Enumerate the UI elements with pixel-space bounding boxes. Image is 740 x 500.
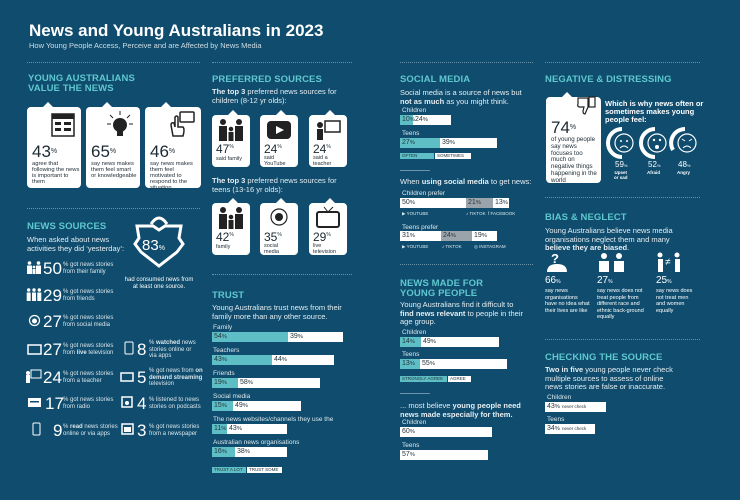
item 8 watched: 8	[137, 340, 146, 359]
card tv 29: live	[313, 243, 321, 249]
chart: trust bars: 39%	[290, 333, 303, 340]
chart: social media often/sometimes: 24%	[415, 116, 428, 123]
face upset 59: 59%	[615, 160, 627, 169]
card 43%	[27, 107, 81, 188]
item 27 tv: from live television	[63, 350, 113, 356]
card 46%: say news makes them feel motivated to respond to the situation	[150, 161, 193, 191]
item 50 family: 50	[43, 259, 62, 278]
chart: trust bars: 15%	[214, 402, 227, 409]
stat 66: say news organisations have no idea what their lives are like	[545, 288, 590, 314]
heading: news sources: NEWS SOURCES	[27, 221, 106, 232]
chart: platform preference: Teens prefer	[402, 224, 438, 231]
chart: platform preference: 13%	[495, 199, 508, 206]
chart: news made for them: Teens	[402, 442, 419, 449]
item 17 radio: from radio	[63, 404, 90, 410]
item 8 watched: % watched news	[149, 340, 196, 346]
card youtube 24: said	[264, 155, 274, 161]
item 50 family: % got news stories	[63, 262, 113, 268]
item 9 read online: 9	[53, 421, 62, 440]
item 50 family: from their family	[63, 268, 106, 274]
card teacher 24: 24%	[313, 142, 331, 156]
text: which is why: Which is why news often or sometimes makes young people feel:	[605, 99, 703, 124]
stat 25	[656, 252, 692, 314]
chart: social media often/sometimes: 39%	[442, 139, 455, 146]
item 27 social	[28, 312, 114, 331]
chart: platform preference: 31%	[402, 232, 415, 239]
card 43%: 43%	[32, 142, 57, 161]
item 3 newspaper	[121, 421, 200, 440]
chart: trust bars: Teachers	[213, 347, 239, 354]
icon: shield 83%: had consumed news from at least one source.	[125, 277, 193, 290]
card tv 29: television	[313, 249, 336, 255]
chart: platform preference: 24%	[443, 232, 456, 239]
chart: relevance agree: AGREE	[450, 376, 466, 381]
card tv 29: 29%	[313, 230, 331, 244]
item 4 podcasts: % listened to news	[149, 397, 199, 403]
chart: trust bars: 49%	[235, 402, 248, 409]
heading: news made for young people: YOUNG PEOPLE	[400, 288, 477, 299]
face upset 59	[606, 127, 634, 180]
card family 42: 42%	[216, 230, 234, 244]
item 9 read online: % read news stories	[63, 424, 118, 430]
item 8 watched: via apps	[149, 353, 171, 359]
icon: shield 83%	[125, 216, 193, 290]
chart: relevance agree: 13%	[402, 360, 415, 367]
face afraid 52: Afraid	[647, 170, 660, 175]
face angry 48	[669, 127, 697, 175]
item 24 teacher: 24	[43, 368, 62, 387]
card social 35: social	[264, 243, 278, 249]
card 65%	[86, 107, 140, 188]
card social 35: media	[264, 249, 279, 255]
chart: news made for them	[400, 419, 492, 460]
item 29 friends: % got news stories	[63, 289, 113, 295]
chart: relevance agree: 14%	[402, 338, 415, 345]
chart: platform preference	[400, 190, 516, 249]
heading: negative & distressing: NEGATIVE & DISTRESSING	[545, 74, 672, 85]
chart: social media often/sometimes: 27%	[402, 139, 415, 146]
item 24 teacher: from a teacher	[63, 378, 102, 384]
chart: relevance agree: 55%	[422, 360, 435, 367]
icon: shield 83%: 83%	[142, 237, 165, 254]
chart: social media often/sometimes: Teens	[402, 130, 419, 137]
chart: relevance agree: Children	[402, 329, 426, 336]
card 46%	[145, 107, 201, 188]
item 24 teacher	[26, 368, 114, 387]
chart: never check: 43% never check	[547, 403, 586, 410]
stat 27: say news does not treat people from different race and ethnic back-ground equally	[597, 288, 644, 320]
item 8 watched	[124, 340, 196, 359]
face angry 48: 48%	[678, 160, 690, 169]
legend trust	[212, 467, 282, 473]
chart: news made for them: Children	[402, 419, 426, 426]
card social 35: 35%	[264, 230, 282, 244]
stat 25: say news does not treat men and women equally	[656, 288, 692, 314]
heading: checking the source: CHECKING THE SOURCE	[545, 352, 662, 363]
item 5 on demand: television	[149, 381, 174, 387]
chart: trust bars: 58%	[240, 379, 253, 386]
item 4 podcasts: 4	[137, 394, 146, 413]
chart: social media often/sometimes: 10%	[402, 116, 415, 123]
icons: emotion faces	[606, 127, 697, 180]
stat 66: 66%	[545, 275, 561, 286]
text: using social media: When using social media to get news:	[400, 177, 531, 186]
chart: platform preference: ▶ YOUTUBE	[402, 211, 428, 216]
subtitle: How Young People Access, Perceive and are Affected by News Media	[29, 41, 262, 50]
text: top 3 teens: The top 3 preferred news sources for teens (13-16 yr olds):	[212, 176, 337, 194]
panel: value cards	[27, 102, 201, 191]
chart: platform preference: f FACEBOOK	[488, 211, 515, 216]
chart: never check: Teens	[547, 416, 564, 423]
card: 74%: of young people say news focuses too much on negative things happening in the world	[551, 136, 597, 184]
heading: young australians value the news: VALUE THE NEWS	[28, 83, 114, 94]
chart: never check	[545, 394, 607, 436]
text: social media: Social media is a source of news but not as much as you might think.	[400, 88, 522, 106]
text: two in five: Two in five young people never check multiple sources to assess of online news stories are false or inaccurate.	[545, 365, 673, 391]
chart: platform preference: 19%	[474, 232, 487, 239]
item 5 on demand: % got news from on	[149, 368, 203, 374]
card youtube 24: YouTube	[264, 161, 286, 167]
card 43%: agree that following the news is important to them	[32, 161, 79, 185]
card teacher 24	[309, 115, 347, 167]
heading: bias & neglect: BIAS & NEGLECT	[545, 212, 627, 223]
face upset 59: Upset	[614, 170, 627, 175]
chart: news made for them: 60%	[402, 428, 415, 435]
item 29 friends	[26, 286, 114, 305]
item 17 radio	[28, 394, 114, 413]
item 27 social: % got news stories	[63, 315, 113, 321]
item 3 newspaper: % got news stories	[149, 424, 199, 430]
card 65%: 65%	[91, 142, 116, 161]
card family 47: 47%	[216, 142, 234, 156]
chart: relevance agree: Teens	[402, 351, 419, 358]
stat 66	[545, 252, 590, 314]
card teacher 24: teacher	[313, 161, 331, 167]
chart: platform preference: ♪ TIKTOK	[442, 244, 462, 249]
chart: trust bars: 43%	[214, 356, 227, 363]
item 5 on demand	[120, 368, 203, 387]
title: News and Young Australians in 2023	[29, 21, 323, 40]
chart: social media often/sometimes	[400, 107, 497, 159]
chart: platform preference: ♪ TIKTOK	[466, 211, 486, 216]
legend trust: TRUST A LOT	[214, 467, 243, 472]
heading: young australians value the news: YOUNG AUSTRALIANS	[28, 73, 135, 84]
item 17 radio: 17	[45, 394, 64, 413]
item 4 podcasts: stories on podcasts	[149, 404, 201, 410]
face angry 48: Angry	[677, 170, 690, 175]
card family 42: family	[216, 244, 230, 250]
stats: bias	[545, 252, 692, 320]
chart: social media often/sometimes: SOMETIMES	[437, 153, 464, 158]
card youtube 24	[260, 115, 298, 167]
chart: news made for them: 57%	[402, 451, 415, 458]
item 3 newspaper: 3	[137, 421, 146, 440]
chart: trust bars: 43%	[229, 425, 242, 432]
heading: young australians value the news	[28, 73, 135, 94]
chart: trust bars: 11%	[214, 425, 226, 432]
text: most believe: ... most believe young people need news made especially for them.	[400, 401, 521, 418]
item 27 tv	[27, 340, 114, 359]
item 3 newspaper: from a newspaper	[149, 430, 197, 436]
text: bias: Young Australians believe news media organisations neglect them and many believe they are biased.	[545, 226, 673, 252]
heading: news made for young people: NEWS MADE FOR	[400, 278, 483, 289]
item 9 read online: online or via apps	[63, 430, 110, 436]
stat 25: 25%	[656, 275, 672, 286]
chart: social media often/sometimes: OFTEN	[402, 153, 417, 158]
item 29 friends: 29	[43, 286, 62, 305]
item 27 tv: 27	[43, 340, 62, 359]
item 27 social: 27	[43, 312, 62, 331]
card family 47: said family	[216, 156, 242, 162]
card tv 29	[309, 203, 347, 255]
heading: social media: SOCIAL MEDIA	[400, 74, 470, 85]
chart: trust bars: 54%	[214, 333, 227, 340]
text: trust: Young Australians trust news from their family more than any other source.	[212, 303, 342, 320]
chart: relevance agree: STRONGLY AGREE	[402, 376, 443, 381]
item 4 podcasts	[121, 394, 201, 413]
item 17 radio: % got news stories	[63, 397, 113, 403]
chart: never check: Children	[547, 394, 571, 401]
chart: trust bars: 19%	[214, 379, 227, 386]
heading: trust: TRUST	[212, 290, 244, 301]
chart: platform preference: 21%	[468, 199, 481, 206]
heading: news made for young people	[400, 278, 483, 299]
stat 27: 27%	[597, 275, 613, 286]
chart: platform preference: ▶ YOUTUBE	[402, 244, 428, 249]
item 27 social: from social media	[63, 322, 110, 328]
chart: social media often/sometimes: Children	[402, 107, 426, 114]
list: news sources	[26, 259, 203, 440]
text: relevance: Young Australians find it difficult to find news relevant to people in their age group.	[400, 300, 523, 326]
stat 25: ≠	[665, 257, 671, 268]
stat 27	[597, 253, 644, 320]
item 9 read online	[32, 421, 118, 440]
chart: never check: 34% never check	[547, 425, 586, 432]
chart: trust bars: Family	[213, 324, 232, 331]
chart: trust bars: The news websites/channels they use the most	[213, 416, 333, 430]
item 24 teacher: % got news stories	[63, 371, 113, 377]
chart: platform preference: ◎ INSTAGRAM	[474, 244, 506, 249]
card youtube 24: 24%	[264, 142, 282, 156]
chart: trust bars	[212, 324, 343, 473]
chart: platform preference: Children prefer	[402, 190, 445, 197]
card family 42	[212, 203, 250, 255]
chart: trust bars: 16%	[214, 448, 227, 455]
intro text news sources: When asked about news activities they did ‘yesterday’:	[27, 235, 124, 252]
card 46%: 46%	[150, 142, 175, 161]
card teacher 24: said a	[313, 155, 328, 161]
cards: children sources	[212, 110, 347, 167]
item 29 friends: from friends	[63, 296, 95, 302]
text: top 3 children: The top 3 preferred news sources for children (8-12 yr olds):	[212, 87, 337, 104]
card family 47	[212, 115, 250, 167]
chart: trust bars: Friends	[213, 370, 235, 377]
chart: trust bars: 38%	[237, 448, 250, 455]
face afraid 52: 52%	[648, 160, 660, 169]
card social 35	[260, 203, 298, 255]
item 5 on demand: 5	[137, 368, 146, 387]
chart: platform preference: 50%	[402, 199, 415, 206]
item 27 tv: % got news stories	[63, 343, 113, 349]
legend trust: TRUST SOME	[249, 467, 278, 472]
face afraid 52	[639, 127, 667, 175]
item 8 watched: stories online or	[149, 346, 191, 352]
card 65%: say news makes them feel smart or knowledgeable	[91, 161, 136, 179]
item 50 family	[27, 259, 114, 278]
cards: teen sources	[212, 198, 347, 255]
chart: relevance agree: 49%	[423, 338, 436, 345]
card: 74%	[546, 97, 601, 183]
chart: trust bars: Australian news organisations	[213, 439, 299, 446]
item 5 on demand: demand streaming	[149, 374, 202, 380]
heading: preferred sources: PREFERRED SOURCES	[212, 74, 322, 85]
chart: trust bars: 44%	[274, 356, 287, 363]
card: 74%: 74%	[551, 118, 576, 137]
chart: trust bars: Social media	[213, 393, 250, 400]
face upset 59: or sad	[614, 175, 628, 180]
chart: relevance agree	[400, 329, 507, 382]
